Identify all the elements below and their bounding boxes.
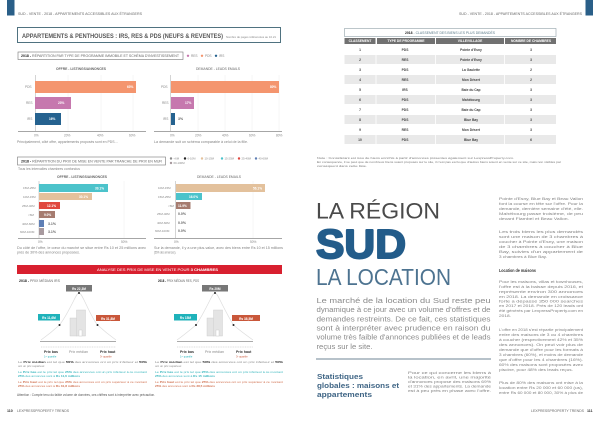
chart: demand by price: 11.9% xyxy=(178,204,187,208)
intro paragraph: demandes restreints. De ce fait, ces statistiques xyxy=(316,316,491,324)
chart: demand by programme: 80% xyxy=(276,134,283,138)
chart: demand by programme xyxy=(154,67,283,138)
body column 2: demande, dernière semaine d'été, elle. xyxy=(499,207,583,211)
chart: demand by price: 0.0% xyxy=(178,229,187,233)
subheading: programme distribution: 2018 - RÉPARTITION PAR TYPE DE PROGRAMME IMMOBILE ET SCHÉMA D'INVESTISSEMENT xyxy=(21,53,180,58)
table note: conséquent dans cette liste. xyxy=(317,164,367,168)
chart: demand by price: 15M-25M xyxy=(158,195,171,199)
subheading: median price xyxy=(18,157,166,171)
median notes: right: 25% des annonces sont à Rs 15 millions xyxy=(155,374,215,378)
body column 2: Les trois biens les plus demandés xyxy=(499,230,583,234)
ranking table: 3 xyxy=(530,108,532,112)
chart: offer by programme: IRS xyxy=(27,117,32,121)
chart: demand by price: 56.1% xyxy=(253,186,262,190)
ranking table: 1 xyxy=(359,48,361,52)
chart: offer by programme: 0% xyxy=(34,134,39,138)
median price: left: 2018 - PRIX MÉDIAN IRS xyxy=(19,278,61,283)
median price: right: Rs 20M xyxy=(209,287,221,291)
chart: demand by price: 10M-15M xyxy=(158,186,171,190)
chart: offer by price: 25M-40M xyxy=(22,204,35,208)
ranking table: Mon Désert xyxy=(462,78,481,82)
median notes: left: 25% des annonces sont à Rs 31,8 millions xyxy=(18,384,80,388)
ranking table: Blue Bay xyxy=(464,118,478,122)
chart captions: price: Du côté de l'offre, le cœur du marché se situe entre Rs 10 et 25 millions avec xyxy=(17,246,146,250)
body column 2: été générés par LexpressProperty.com en xyxy=(499,309,583,313)
chart: demand by programme: PDS xyxy=(161,85,168,89)
median notes: left: ont un prix supérieur. xyxy=(18,364,45,368)
chart: demand by programme: 80% xyxy=(270,85,277,89)
chart: offer by price: OFFRE - LISTINGS/ANNONCES xyxy=(57,175,108,179)
median price: right: Prix bas xyxy=(180,350,194,354)
chart captions: programme xyxy=(17,140,248,144)
median price: right: Rs 38,5M xyxy=(239,317,253,321)
median price: right: Prix haut xyxy=(236,350,252,354)
legend: price bands xyxy=(170,156,269,165)
ranking table: PDS xyxy=(402,68,409,72)
ranking table: Baie du Cap xyxy=(461,108,481,112)
main title: LA RÉGION xyxy=(316,198,440,224)
ranking table: 2 xyxy=(359,58,361,62)
chart: offer by programme: OFFRE - LISTINGS/ANNONCES xyxy=(56,67,107,71)
ranking table: 2 xyxy=(530,78,532,82)
legend: price bands: 10-15M xyxy=(204,156,215,160)
body column 2: en 2018. La demande en croissance xyxy=(499,295,583,299)
intro paragraph: reçus sur le site. xyxy=(316,344,373,351)
ranking table: PDS xyxy=(402,138,409,142)
ranking table: 5 xyxy=(359,88,361,92)
body column 2 xyxy=(499,197,584,395)
median notes: right xyxy=(155,360,283,388)
body column 2: Pour les maisons, villas et townhouses, xyxy=(499,280,583,284)
icon: buildings xyxy=(70,310,86,336)
legend: price bands: 40-60M xyxy=(258,156,269,160)
ranking table: RES xyxy=(402,78,409,82)
body column 2: de 3 chambres à coucher à Blue xyxy=(499,245,583,249)
body column 2: 2018. xyxy=(499,314,511,318)
chart: offer by programme: 63% xyxy=(127,85,134,89)
body column 2: forte a dépassé 350 000 searches xyxy=(499,300,583,304)
section title box xyxy=(18,28,280,42)
main title: LA LOCATION xyxy=(316,264,451,290)
median notes: right: ont un prix supérieur. xyxy=(155,364,182,368)
chart: offer by price: 60M-100M xyxy=(20,230,35,234)
ranking table: Mahébourg xyxy=(462,98,480,102)
chart: demand by price: 60M-100M xyxy=(155,229,170,233)
median price: left: Prix médian xyxy=(69,350,88,354)
body column 2: entre Rs 60 000 et 80 000, 30% à plus de xyxy=(499,391,583,395)
intro paragraph xyxy=(316,298,491,351)
body column 2: l'offre est à la baisse depuis 2016, et xyxy=(499,285,584,289)
chart: demand by programme: 40% xyxy=(222,134,229,138)
chart: demand by programme: 3% xyxy=(178,117,184,121)
chart captions: price: (56% des annonces). xyxy=(154,250,176,254)
chart: demand by programme: DEMANDE - LEADS EMAILS xyxy=(196,67,241,71)
subheading: statistiques globales: appartements xyxy=(317,392,372,399)
median notes: right: 25% des annonces sont à Rs 38,5 millions xyxy=(155,384,215,388)
ranking table: 3 xyxy=(530,118,532,122)
body column 2: représente environ 300 annonces xyxy=(499,290,583,294)
chart captions: price: près de 30% des annonces proposées. xyxy=(17,250,80,254)
chart: offer by programme: 40% xyxy=(97,134,104,138)
body column 2: Pointe d'Esny, Blue Bay et Beau Vallon xyxy=(499,197,583,201)
chart: offer by programme: PDS xyxy=(25,85,32,89)
ranking table: 2018 - CLASSEMENT DES BIENS LES PLUS DEMANDÉS xyxy=(405,30,496,35)
body column 2: 60% des maisons sont proposées avec xyxy=(499,363,583,367)
legend: programme: IRS xyxy=(219,54,224,58)
table note: En conséquence, il se peut que de nombreux biens soient proposés sur le site, il n'est pas exclu que d'autres biens soient en vente sur ce site, mais non visibles par xyxy=(317,160,561,164)
chart: offer by programme: 23% xyxy=(58,101,65,105)
left footer: 110 xyxy=(7,409,13,413)
median notes: left: Le Prix haut est le prix tel que 25% des annonces ont un prix supérieur à ce montant xyxy=(18,380,147,384)
median price: right: Rs 15M xyxy=(180,316,191,320)
body column 1: la location, en avril, une majorité xyxy=(408,376,491,380)
chart: offer by price: 15M-25M xyxy=(23,186,36,190)
body column 1: et 31% des appartements. La demande xyxy=(408,384,491,388)
median notes: right: Le Prix haut est le prix tel que 25% des annonces ont un prix supérieur à ce montant xyxy=(155,380,283,384)
body column 2: entre des maisons de 3 ou 4 chambres xyxy=(499,333,583,337)
intro paragraph: volume très faible d'annonces publiées et de leads xyxy=(316,334,491,342)
subheading: programme distribution xyxy=(18,52,183,60)
chart: demand by price: DEMANDE - LEADS EMAILS xyxy=(197,175,242,179)
intro paragraph: Le marché de la location du Sud reste peu xyxy=(316,298,491,305)
chart: demand by price: 0.0% xyxy=(178,212,187,216)
ranking table: 3 xyxy=(530,58,532,62)
chart: demand by price: <6M xyxy=(168,204,174,208)
ranking table: VILLE/VILLAGE xyxy=(458,39,483,43)
body column 2: Location de maisons xyxy=(499,268,537,273)
legend: price bands: 6-10M xyxy=(188,156,196,160)
median price: left xyxy=(19,278,120,358)
legend: price bands: <6M xyxy=(174,156,180,160)
chart: offer by price: 39.1% xyxy=(95,186,104,190)
ranking table: IRS xyxy=(402,88,409,92)
ranking table xyxy=(344,28,556,144)
chart: demand by price: 16.0% xyxy=(189,195,198,199)
main title xyxy=(316,198,451,290)
body column 1: d'annonces propose des maisons 69% xyxy=(408,380,492,384)
section title box: APPARTEMENTS & PENTHOUSES : IRS, RES & PDS (NEUFS & REVENTES) xyxy=(22,34,223,40)
ranking table: PDS xyxy=(402,98,409,102)
body column 2: Plus de 80% des maisons ont mise à la xyxy=(499,381,584,385)
ranking table: 8 xyxy=(359,118,361,122)
legend: programme xyxy=(187,54,224,58)
ranking table: 2 xyxy=(530,68,532,72)
table note: Note : Considérant est issu de biens enrichis à partir d'annonces présentes également sur LexpressProperty.com. xyxy=(317,156,514,160)
ranking table: La Gaulette xyxy=(462,68,480,72)
body column 2: coucher à Pointe d'Esny, une maison xyxy=(499,240,583,244)
body column 2: en 2017 et 2018. Près de 120 leads ont xyxy=(499,304,584,308)
intro paragraph: dynamique à ce jour avec un volume d'offres et de xyxy=(316,307,491,314)
ranking table: 3 xyxy=(359,68,361,72)
intro paragraph: sont à interpréter avec prudence en raison du xyxy=(316,326,491,332)
median price: right xyxy=(158,278,260,358)
legend: price bands: 60-100M xyxy=(174,161,185,165)
ranking table: Baie du Cap xyxy=(461,88,481,92)
chart: offer by programme xyxy=(18,67,146,138)
chart: offer by price: 50% xyxy=(121,240,128,244)
ranking table: 3 xyxy=(530,98,532,102)
right footer: LEXPRESSPROPERTY TRENDS xyxy=(531,409,585,413)
chart: offer by price: 12.1% xyxy=(47,204,56,208)
body column 2: font la course en tête sur l'offre. Pour la xyxy=(499,202,584,206)
chart captions: price: Sur la demande, il y a une plus-value, avec des biens entre Rs 10 et 15 millions xyxy=(154,246,283,250)
body column 2: devant Flambel et Beau Vallon. xyxy=(499,217,569,221)
left footer: LEXPRESSPROPERTY TRENDS xyxy=(17,409,70,413)
ranking table: NOMBRE DE CHAMBRES xyxy=(511,39,552,43)
body column 2: Mahébourg passe troisième, de peu xyxy=(499,212,583,216)
ranking table: 6 xyxy=(359,98,361,102)
median price: right: 1ᵉʳ quartile xyxy=(180,354,193,358)
icon: buildings xyxy=(207,310,222,336)
chart: demand by price: 0.0% xyxy=(178,221,187,225)
chart captions: price xyxy=(17,246,283,254)
chart: demand by programme: 20% xyxy=(195,134,202,138)
body column 2: à coucher (respectivement 42% et 35% xyxy=(499,338,584,342)
ranking table: 4 xyxy=(359,78,361,82)
median price: left: Prix haut xyxy=(100,350,116,354)
red banner: ANALYSE DES PRIX DE MISE EN VENTE POUR 3 CHAMBRES xyxy=(97,268,219,272)
median price: left: Rs 11,6M xyxy=(42,316,56,320)
left page header xyxy=(7,0,143,16)
ranking table: 7 xyxy=(359,108,361,112)
right page header: SUD - VENTE - 2018 - APPARTEMENTS ACCESSIBLES AUX ÉTRANGERS xyxy=(459,11,583,16)
table note xyxy=(317,156,561,168)
median price: right: 3ᵉ quartile xyxy=(236,354,248,358)
ranking table: 10 xyxy=(358,138,362,142)
median notes: left: 25% des annonces sont à Rs 11,6 millions xyxy=(18,374,80,378)
section title box: Nombre de pages référencées au 10.21 xyxy=(226,35,277,39)
legend: price bands: 15-25M xyxy=(224,156,235,160)
median notes: left xyxy=(18,360,147,388)
chart: offer by price: 0% xyxy=(38,240,43,244)
subheading: median price: 2018 - RÉPARTITION DU PRIX DE MISE EN VENTE PAR TRANCHE DE PRIX EN MUR xyxy=(21,159,162,164)
median price: left: 1ᵉʳ quartile xyxy=(44,354,57,358)
chart: offer by programme: RES xyxy=(26,101,33,105)
ranking table: PDS xyxy=(402,108,409,112)
ranking table: Mon Désert xyxy=(462,128,481,132)
chart: demand by price: 25M-40M xyxy=(157,212,170,216)
body column 2: sont une maison de 3 chambres à xyxy=(499,235,584,239)
median notes: right: Le Prix médian est tel que 50% des annonces ont un prix inférieur et 50% xyxy=(155,360,283,364)
body column 1 xyxy=(408,371,492,393)
body column 2: location entre Rs 20 000 et 60 000 (us), xyxy=(499,386,583,390)
subheading: statistiques globales xyxy=(317,374,400,399)
body column 2: demande que d'offre pour les formats à xyxy=(499,348,584,352)
ranking table: Blue Bay xyxy=(464,138,478,142)
chart: offer by programme: 16% xyxy=(49,117,56,121)
red banner xyxy=(17,265,282,274)
chart: offer by price: 3.1% xyxy=(48,230,57,234)
chart captions: programme: La demande suit un schéma comparable à celui de la fille. xyxy=(154,140,248,144)
ranking table: 3 xyxy=(530,48,532,52)
body column 2: des annonces). On peut voir plus de xyxy=(499,343,583,347)
chart: demand by programme: IRS xyxy=(163,117,168,121)
main title: SUD xyxy=(316,221,406,267)
chart: offer by programme: 20% xyxy=(64,134,71,138)
body column 2: 3 chambres à Blue Bay. xyxy=(499,255,547,259)
chart: offer by price: <6M xyxy=(28,213,34,217)
median price: left: Rs 22,3M xyxy=(72,287,86,291)
chart: offer by price: 10M-15M xyxy=(23,195,36,199)
legend: price bands: 25-40M xyxy=(242,156,252,160)
body column 2: 3 chambres (60%), et moins de demande xyxy=(499,353,583,357)
chart: demand by price: 50% xyxy=(250,240,257,244)
ranking table: RES xyxy=(402,128,409,132)
chart: demand by price xyxy=(154,175,282,244)
body column 2: piscine, pour 48% des leads reçus. xyxy=(499,368,573,372)
legend: programme: PDS xyxy=(205,54,212,58)
body column 2: que d'offre pour les 4 chambres (16%). xyxy=(499,358,583,362)
chart: demand by price: 40M-60M xyxy=(157,221,170,225)
ranking table: CLASSEMENT xyxy=(349,39,371,43)
divider rule xyxy=(316,358,491,360)
chart: offer by price: 9.0% xyxy=(44,213,51,217)
chart: offer by price: 30.1% xyxy=(79,195,88,199)
subheading: statistiques globales: globales : maisons et xyxy=(317,383,400,390)
ranking table: RES xyxy=(402,58,409,62)
legend: programme: RES xyxy=(191,54,198,58)
ranking table: 3 xyxy=(530,88,532,92)
right page header xyxy=(459,0,593,16)
chart captions: programme: Principalement, côté offre, appartements proposés sont en PDS… xyxy=(17,140,118,144)
median price: left: Rs 31,8M xyxy=(101,317,115,321)
median price: right: Prix médian xyxy=(205,350,224,354)
ranking table: 6 xyxy=(530,138,532,142)
median price: left: 3ᵉ quartile xyxy=(100,354,112,358)
chart: demand by programme: RES xyxy=(162,101,169,105)
ranking table: 3 xyxy=(530,128,532,132)
left page header: SUD - VENTE - 2018 - APPARTEMENTS ACCESSIBLES AUX ÉTRANGERS xyxy=(18,11,143,16)
ranking table: TYPE DE PROGRAMME xyxy=(387,39,425,43)
ranking table: Pointe d'Esny xyxy=(460,48,482,52)
right footer: 111 xyxy=(587,409,593,413)
chart: demand by programme: 60% xyxy=(249,134,256,138)
subheading: statistiques globales: Statistiques xyxy=(317,374,363,381)
ranking table: PDS xyxy=(402,48,409,52)
median notes: left: Le Prix bas est le prix tel que 25% des annonces ont un prix inférieur à ce montant xyxy=(18,370,147,374)
median price: left: Prix bas xyxy=(44,350,58,354)
chart: offer by price: 40M-60M xyxy=(22,222,35,226)
body column 1: est à peu près en phase avec l'offre. xyxy=(408,389,491,393)
subheading: median price: Tous les intervalles chambres confondus xyxy=(18,167,80,171)
body column 2: L'offre en 2018 s'est répartie principalement xyxy=(499,328,584,332)
ranking table: 9 xyxy=(359,128,361,132)
chart: demand by programme: 0% xyxy=(170,134,175,138)
body column 2: Bay, suivies d'un appartement de xyxy=(499,250,583,254)
ranking table: Pointe d'Esny xyxy=(460,58,482,62)
ranking table: PDS xyxy=(402,118,409,122)
median price: right: 2018 - PRIX MÉDIAN RES, PDS xyxy=(158,278,200,283)
chart: demand by price: 0% xyxy=(174,240,179,244)
chart: demand by programme: 17% xyxy=(185,101,192,105)
warning note: Attention : Compte tenu du faible volume de données, ces chiffres sont à interpréter avec précaution. xyxy=(17,393,155,397)
chart: offer by price xyxy=(18,175,146,244)
chart: offer by price: 3.1% xyxy=(48,222,57,226)
body column 1: Pour ce qui concerne les biens à xyxy=(408,371,492,375)
median notes: left: Le Prix médian est tel que 50% des annonces ont un prix inférieur et 50% xyxy=(18,360,147,364)
median notes: right: Le Prix bas est le prix tel que 25% des annonces ont un prix inférieur à ce montant xyxy=(155,370,283,374)
chart: offer by programme: 60% xyxy=(129,134,136,138)
